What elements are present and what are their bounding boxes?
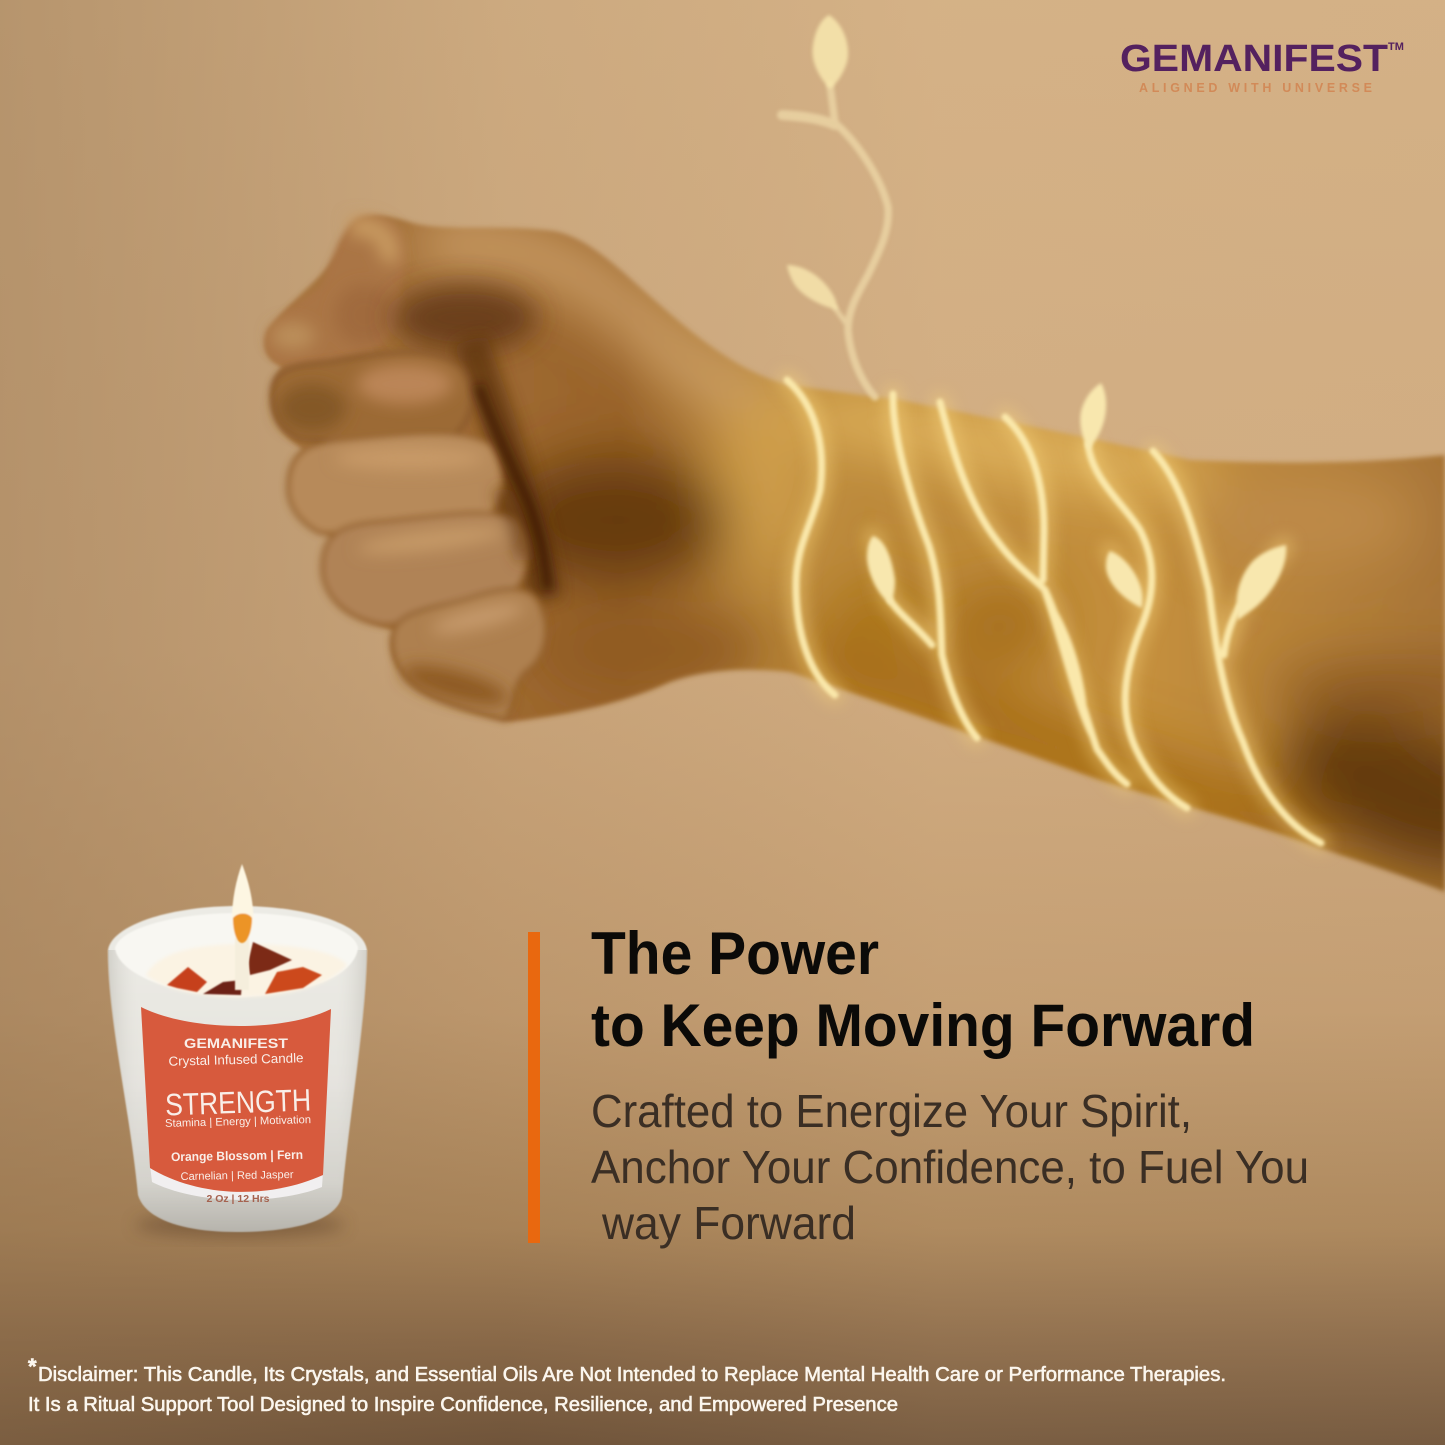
label text: Crystal Infused Candle bbox=[168, 1050, 304, 1069]
label text: GEMANIFEST bbox=[184, 1035, 289, 1051]
label white strip bbox=[150, 1165, 323, 1200]
jar side shading bbox=[108, 950, 367, 1232]
logo bbox=[1120, 38, 1404, 95]
vine glow bbox=[787, 380, 1321, 843]
candle shadow bbox=[135, 1213, 345, 1237]
dark crease behind the thumb and fingers bbox=[393, 284, 545, 600]
disclaimer bbox=[28, 1354, 1226, 1416]
product: strength candle bbox=[108, 864, 367, 1237]
label text: Carnelian | Red Jasper bbox=[180, 1169, 294, 1183]
vine lines bbox=[787, 380, 1321, 843]
trademark: TM bbox=[1388, 41, 1404, 53]
label text: Orange Blossom | Fern bbox=[171, 1148, 303, 1164]
thumb bbox=[265, 216, 405, 366]
label text: Stamina | Energy | Motivation bbox=[165, 1114, 311, 1130]
heading: to Keep Moving Forward bbox=[591, 992, 1255, 1059]
fingers bbox=[272, 353, 548, 720]
logo wordmark: GEMANIFEST bbox=[1120, 38, 1388, 80]
deep crease line bbox=[478, 385, 548, 590]
logo tagline: ALIGNED WITH UNIVERSE bbox=[1139, 81, 1372, 95]
wax bbox=[146, 944, 347, 997]
subheading: Crafted to Energize Your Spirit, bbox=[591, 1085, 1192, 1137]
label text: STRENGTH bbox=[165, 1082, 312, 1123]
heading: The Power bbox=[591, 920, 879, 987]
flame bbox=[232, 864, 253, 943]
wick bbox=[235, 938, 249, 990]
illustration: clenched fist and forearm bbox=[250, 200, 1445, 903]
label text: 2 Oz | 12 Hrs bbox=[206, 1193, 270, 1205]
illustration: glowing golden vines bbox=[782, 15, 1321, 843]
subheading: Anchor Your Confidence, to Fuel You bbox=[591, 1141, 1309, 1193]
accent bar bbox=[528, 932, 540, 1243]
disclaimer: It Is a Ritual Support Tool Designed to Inspire Confidence, Resilience, and Empowered Presence bbox=[28, 1394, 898, 1416]
heading bbox=[591, 920, 1255, 1059]
candle label bbox=[141, 1007, 331, 1205]
vine leaves bbox=[787, 15, 1286, 620]
jar opening bbox=[115, 913, 358, 997]
label text bbox=[165, 1035, 312, 1205]
disclaimer: * bbox=[28, 1354, 37, 1379]
upper vine bbox=[782, 85, 888, 397]
glass jar bbox=[108, 906, 367, 1232]
crystals bbox=[167, 942, 322, 995]
subheading: way Forward bbox=[601, 1197, 856, 1249]
disclaimer: Disclaimer: This Candle, Its Crystals, and Essential Oils Are Not Intended to Replace Mental Health Care or Performance Therapies. bbox=[38, 1364, 1226, 1386]
subheading bbox=[591, 1085, 1309, 1249]
hand shading bbox=[420, 244, 1445, 903]
